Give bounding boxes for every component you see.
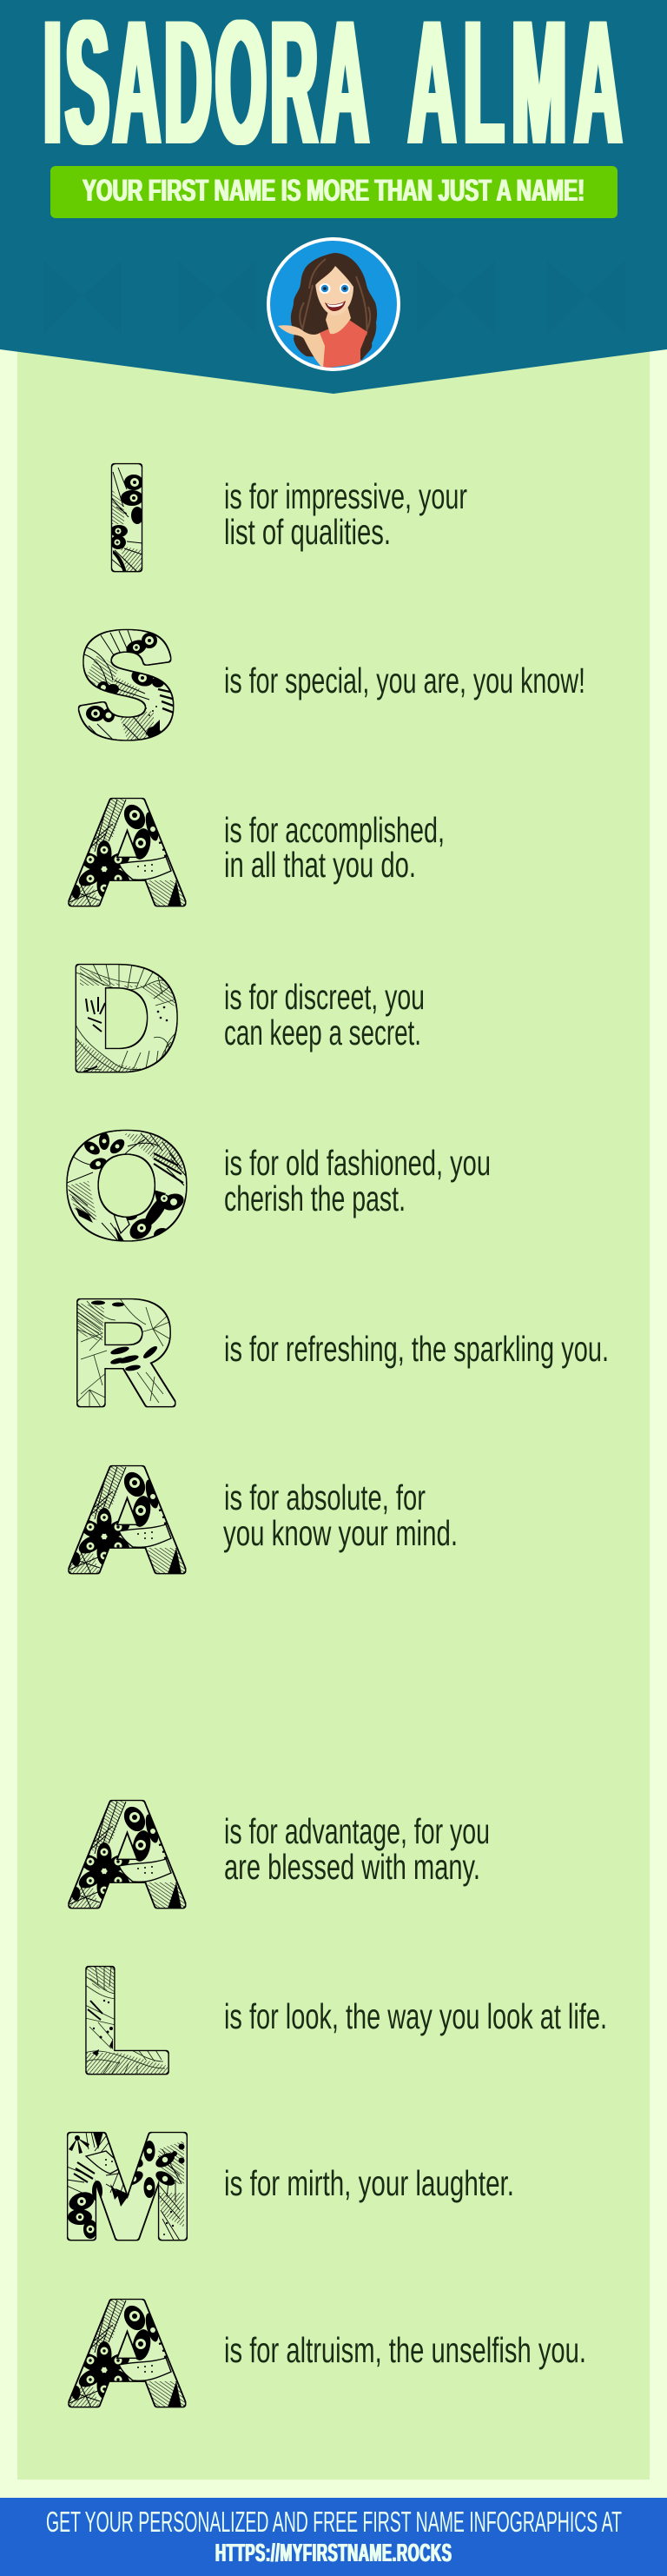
row: A (altruism)	[69, 2271, 586, 2434]
row: A	[69, 770, 445, 933]
subtitle banner	[50, 166, 617, 218]
row: A (advantage)	[69, 1772, 490, 1935]
row: O	[64, 1104, 491, 1267]
text: absolute	[223, 1477, 458, 1553]
text: absolute: is for absolute, for	[224, 1477, 426, 1517]
letter L: L	[80, 1938, 169, 2101]
text: accomplished: in all that you do.	[224, 845, 416, 885]
text: old fashioned	[224, 1143, 491, 1218]
footer line: url: HTTPS://MYFIRSTNAME.ROCKS	[215, 2539, 452, 2567]
letter I: I	[105, 435, 149, 599]
letter A: A	[69, 1772, 186, 1935]
letter D: D	[69, 936, 180, 1099]
text: discreet: is for discreet, you	[224, 977, 425, 1017]
letter A: A	[69, 2271, 186, 2434]
letter S: S	[78, 603, 175, 767]
text: mirth: is for mirth, your laughter.	[224, 2163, 514, 2203]
text: impressive: is for impressive, your	[224, 476, 467, 516]
text: discreet	[224, 977, 425, 1052]
text: advantage	[224, 1811, 490, 1887]
row: A (absolute)	[69, 1437, 458, 1601]
letter A: A	[69, 1437, 186, 1601]
text: accomplished	[224, 810, 445, 885]
header banner with chevron and portrait	[0, 0, 667, 394]
text: accomplished: is for accomplished,	[224, 810, 445, 850]
panel: light green content background	[17, 330, 650, 2480]
text: impressive: list of qualities.	[224, 512, 391, 552]
icon: portrait of smiling woman	[267, 237, 400, 371]
footer band	[0, 2498, 667, 2576]
row: M	[61, 2104, 514, 2267]
letter A: A	[69, 770, 186, 933]
text: discreet: can keep a secret.	[224, 1012, 421, 1052]
row: I	[105, 435, 467, 599]
text: old fashioned: cherish the past.	[224, 1178, 406, 1218]
letter O: O	[64, 1104, 189, 1267]
text: impressive	[224, 476, 467, 552]
letter R: R	[71, 1271, 175, 1434]
row: R	[71, 1271, 609, 1434]
text: advantage: is for advantage, for you	[224, 1811, 490, 1851]
row: L	[80, 1938, 607, 2101]
row: D	[69, 936, 425, 1099]
letter M: M	[61, 2104, 194, 2267]
text: absolute: you know your mind.	[223, 1513, 458, 1553]
text: advantage: are blessed with many.	[224, 1847, 480, 1887]
row: S	[78, 603, 585, 767]
subtitle text: YOUR FIRST NAME IS MORE THAN JUST A NAME!	[83, 174, 584, 208]
shirt and arm	[320, 320, 367, 368]
text: old fashioned: is for old fashioned, you	[224, 1143, 491, 1183]
